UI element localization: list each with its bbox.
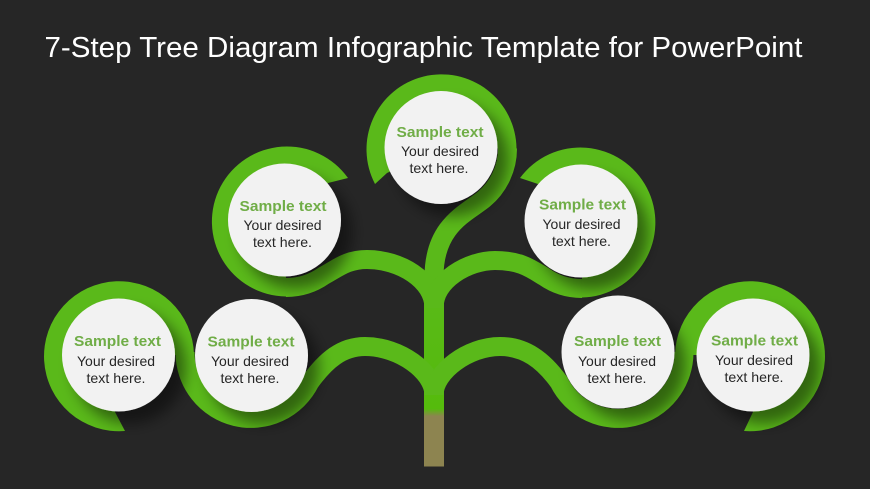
branch: upper left <box>212 147 434 308</box>
step 1: far left: Your desired <box>77 353 155 369</box>
step 3: upper left <box>228 164 341 276</box>
step 1: far left: Sample text <box>74 333 161 350</box>
step 1: far left <box>62 298 175 412</box>
step 7: far right: text here. <box>724 369 784 385</box>
step 4: top: text here. <box>410 160 468 176</box>
trunk <box>424 275 444 466</box>
step 6: lower right <box>562 296 674 408</box>
step 4: top: Your desired <box>401 143 479 159</box>
step 3: upper left: text here. <box>253 234 312 250</box>
step 7: far right: Sample text <box>711 332 798 350</box>
step 5: upper right: Your desired <box>542 216 620 232</box>
step 3: upper left: Sample text <box>240 198 327 215</box>
branch: upper right <box>434 148 655 308</box>
step 5: upper right: Sample text <box>539 196 626 214</box>
branch: top <box>367 74 516 277</box>
step 6: lower right: Your desired <box>578 353 656 369</box>
step 5: upper right: text here. <box>552 233 611 249</box>
step 6: lower right: Sample text <box>574 333 661 350</box>
step 2: lower left: text here. <box>220 370 280 386</box>
branch: lower left <box>44 281 434 431</box>
tree diagram <box>44 74 825 466</box>
step 2: lower left: Your desired <box>211 353 289 369</box>
step 1: far left: text here. <box>86 370 146 386</box>
step 6: lower right: text here. <box>588 370 646 386</box>
title: 7-Step Tree Diagram Infographic Template for PowerPoint <box>44 32 802 64</box>
step 2: lower left <box>195 299 308 412</box>
step 3: upper left: Your desired <box>244 217 322 233</box>
step 2: lower left: Sample text <box>208 334 295 350</box>
step 7: far right: Your desired <box>715 352 793 368</box>
step 4: top: Sample text <box>396 124 484 141</box>
step 4: top <box>384 91 498 204</box>
step 5: upper right <box>524 164 638 278</box>
step 7: far right <box>696 298 810 412</box>
branch: lower right <box>434 281 825 431</box>
